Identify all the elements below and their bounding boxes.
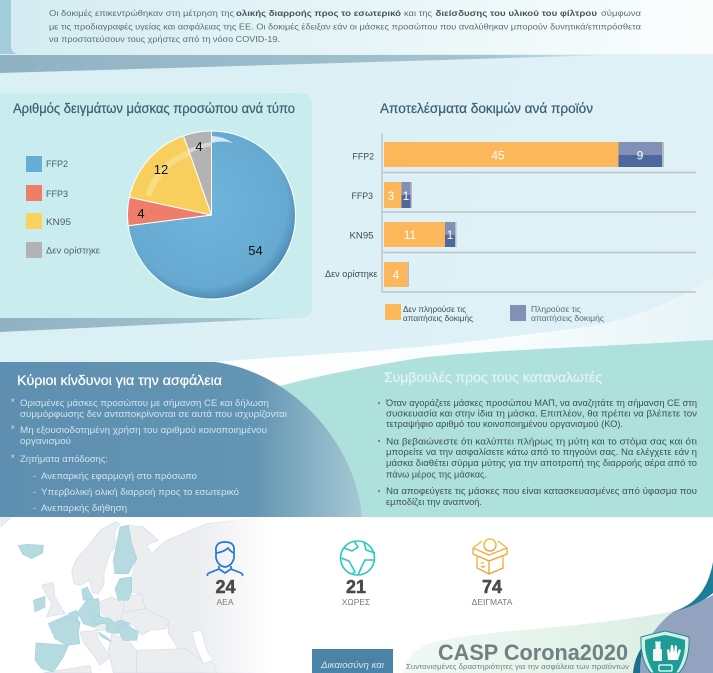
risks list: - [33,503,36,514]
icon: person [207,542,243,576]
bar: FFP2 [384,142,662,167]
pie legend: FFP2 [46,159,68,170]
statistic: authorities [207,542,243,607]
risks list: - [33,487,36,498]
bottom white area [0,517,713,673]
risks list: Ανεπαρκής διήθηση [41,503,127,514]
intro text [49,8,641,44]
footer: subtitle: Συντονισμένες δραστηριότητες για την ασφάλεια των προϊόντων [406,662,629,671]
footer: CASP title: CASP Corona2020 [438,640,628,665]
risks list: Ζητήματα απόδοσης: [20,454,108,465]
statistic: countries [340,541,375,607]
Caspian sea [192,630,213,664]
risks list: Ανεπαρκής εφαρμογή στο πρόσωπο [41,471,197,482]
statistic: samples [472,539,513,607]
statistic: samples: 74 [482,577,502,597]
map of Europe [1,517,300,673]
bar axis labels: KN95 [350,230,374,242]
footer: department box: Δικαιοσύνη και [320,660,384,671]
bar: not specified: 4 [393,268,400,282]
risks list: Ορισμένες μάσκες προσώπου με σήμανση CE και δήλωση [20,398,269,409]
advice list: συσκευασία και στην ίδια τη μάσκα. Επιπλέον, θα πρέπει να βλέπετε τον [386,408,698,418]
bar legend: απαιτήσεις δοκιμής [403,313,473,323]
icon: open box [473,539,507,574]
bar axis labels: Δεν ορίστηκε [325,269,378,280]
advice list: Να αποφεύγετε τις μάσκες που είναι κατασκευασμένες από ύφασμα που [386,486,697,496]
intro text: διείσδυσης του υλικού του φίλτρου [436,8,597,18]
bar: not specified [384,262,408,287]
white swoosh [215,277,713,386]
bar: KN95: 11 [404,228,417,242]
bar: FFP3: 1 [403,189,410,203]
icon: globe [340,541,375,575]
bar axis labels [325,152,378,280]
advice list: μπορείτε να την ασφαλίσετε κάτω από το πηγούνι σας. Να ελέγχετε εάν η [386,447,697,457]
risks list: Υπερβολική ολική διαρροή προς το εσωτερικό [41,487,239,498]
intro text: σύμφωνα [601,8,641,18]
intro text: ολικής διαρροής προς το εσωτερικό [236,8,401,18]
footer [312,562,713,673]
intro text: Οι δοκιμές επικεντρώθηκαν στη μέτρηση της [49,8,234,18]
advice list: Όταν αγοράζετε μάσκες προσώπου ΜΑΠ, να αναζητάτε τη σήμανση CE στη [385,398,697,408]
risks list: * [11,453,15,463]
panel: consumer advice [280,340,713,517]
panel: samples by type [0,93,312,332]
bar: FFP3: 3 [388,189,395,203]
bar axis labels: FFP3 [352,191,373,202]
pie legend: KN95 [46,217,71,228]
panel: main safety risks [0,362,362,517]
risks list: * [11,424,15,434]
advice list: μάσκα διαθέτει σύρμα μύτης για την αποτροπή της διαρροής αέρα από το [386,458,697,468]
pie chart: 54 [248,243,263,258]
heading: main safety risks: Κύριοι κίνδυνοι για την ασφάλεια [17,372,222,388]
bar: KN95 [384,222,455,247]
footer: department box [312,649,393,673]
advice list: Να βεβαιώνεστε ότι καλύπτει πλήρως τη μύτη και το στόμα σας και ότι [386,436,697,446]
top text panel [0,0,713,73]
risks list: συμμόρφωσης δεν ανταποκρίνονται σε αυτά που ισχυρίζονται [20,409,287,420]
risks list: οργανισμού [20,436,71,447]
advice list: τετραψήφιο αριθμό του κοινοποιημένου οργανισμού (ΚΟ). [386,419,623,429]
risks list: - [33,471,36,482]
pie chart: 4 [137,206,145,221]
statistic: authorities: 24 [215,577,236,597]
heading: samples by type: Αριθμός δειγμάτων μάσκας προσώπου ανά τύπο [13,100,295,116]
shadows [407,142,664,287]
statistic: authorities: AEA [216,597,234,607]
pie legend: Δεν ορίστηκε [46,246,101,256]
statistic: samples: ΔΕΙΓΜΑΤΑ [472,597,513,607]
intro text: και της [404,8,432,18]
pie chart [128,131,296,299]
advice list [378,398,698,507]
heading: test results: Αποτελέσματα δοκιμών ανά προϊόν [380,100,593,116]
bar legend: Δεν πληρούσε τις [403,304,466,314]
intro text: να προστατεύσουν τους χρήστες από τη νόσο COVID-19. [49,34,280,44]
panel: test results by product [325,100,696,323]
bar axis labels: FFP2 [352,152,374,162]
statistic: countries: 21 [346,577,366,597]
pie legend: FFP3 [46,189,68,200]
statistic: countries: ΧΩΡΕΣ [342,597,370,607]
bar: FFP3 [384,182,410,208]
bar chart [325,133,696,292]
bar: FFP2: 9 [637,148,644,162]
bar legend: Πληρούσε τις [531,304,581,314]
risks list [11,397,287,514]
risks list: * [11,397,15,407]
pie chart: 12 [154,162,168,177]
pie legend [26,156,101,258]
advice list: πάνω μέρος της μάσκας. [386,470,487,480]
risks list: Μη εξουσιοδοτημένη χρήση του αριθμού κοινοποιημένου [20,425,267,436]
bar: FFP2: 45 [491,148,505,162]
bar legend [385,304,604,323]
bar legend: απαιτήσεις δοκιμής [531,313,604,323]
intro text: με τις προδιαγραφές υγείας και ασφάλειας της ΕΕ. Οι δοκιμές έδειξαν εάν οι μάσκες προσώπου που αναλύθηκαν μπορούν δυνητικά/επιπρόσθετα [49,22,641,32]
heading: consumer advice: Συμβουλές προς τους καταναλωτές [384,369,602,385]
bar: KN95: 1 [447,228,454,242]
icon: shield [641,631,689,673]
pie chart: 4 [195,139,203,154]
advice list: εμποδίζει την αναπνοή. [386,497,482,507]
